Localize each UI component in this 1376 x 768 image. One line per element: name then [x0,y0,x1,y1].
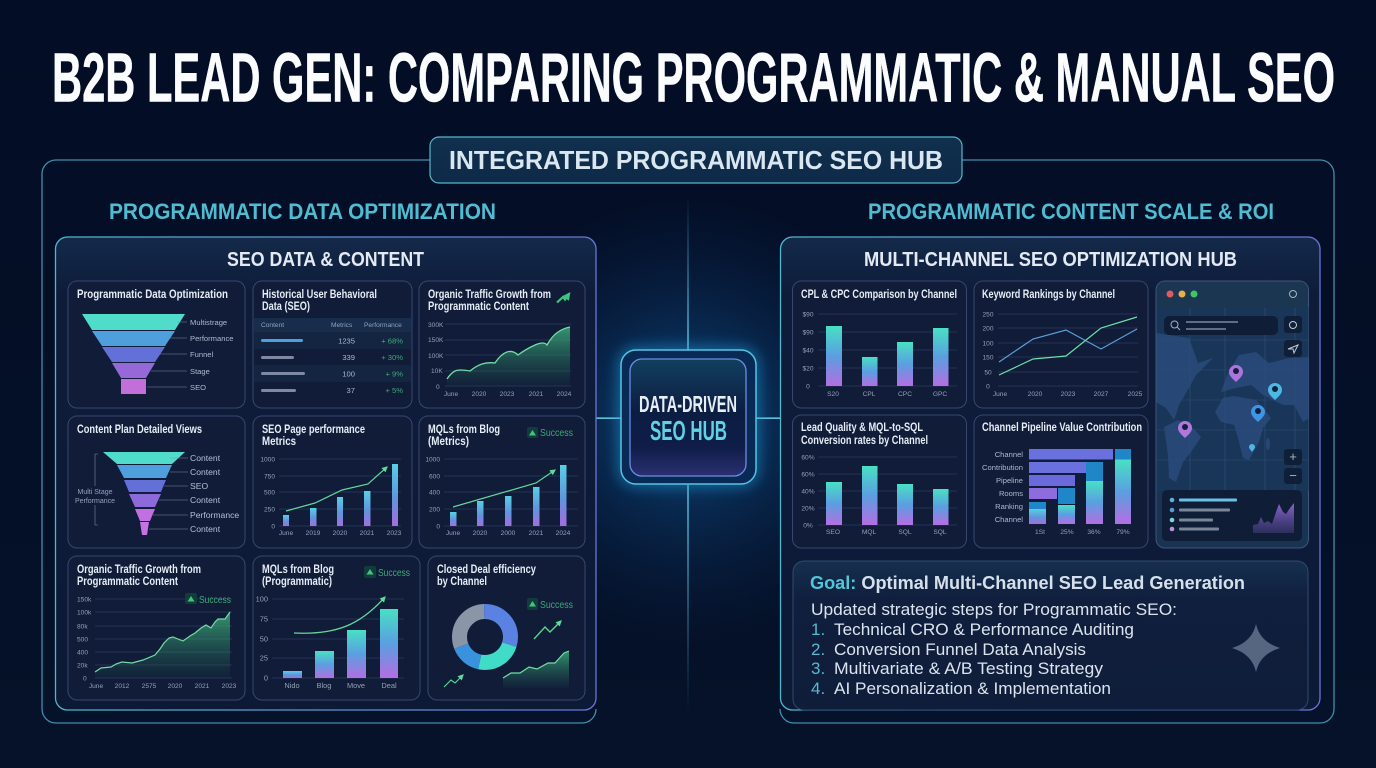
bar chart: Move [347,681,365,690]
card: CPL and CPC comparison: CPL & CPC Comparison by Channel [801,287,957,301]
funnel chart: Stage [190,367,210,376]
success badge [185,593,231,606]
panel: multi-channel SEO optimization hub [780,237,1320,710]
bar and line chart: 2021 [360,530,375,537]
bar and line chart: 500 [264,490,275,496]
area chart: 150K [428,337,444,344]
card: channel pipeline value: Channel Pipeline Value Contribution [982,420,1142,434]
bar chart: 100 [256,594,268,604]
bar chart: 0 [264,674,268,682]
strategic steps list: 1. [811,620,825,639]
stacked bar chart: Contribution [982,463,1023,472]
bar and line chart: June [279,530,293,537]
bar and line chart [425,456,578,537]
bar chart: 60% [801,454,815,462]
bar chart: Blog [317,681,331,690]
arrow: small trend up right [534,621,561,639]
bar chart: 0% [803,522,813,530]
central hub: SEO HUB [650,415,727,446]
search bar [1164,316,1278,335]
success badge: Success [540,428,573,439]
card: SEO page performance metrics [253,416,412,548]
area chart: 2023 [500,391,515,398]
bar and line chart: 400 [429,490,440,496]
funnel chart: Multistrage [190,318,227,327]
area chart: June [89,683,103,690]
bar and line chart: 0 [271,524,275,530]
bar chart: Nido [284,681,300,690]
bar chart [802,312,957,398]
card: historical user behavioral data [253,281,412,408]
area chart: 300K [428,322,444,329]
area chart [77,596,237,690]
card: lead quality MQL to SQL: Lead Quality & MQL-to-SQL [801,420,923,434]
data table: + 9% [385,370,403,378]
browser title bar [1156,282,1308,307]
card: SEO page performance metrics: SEO Page performance [262,422,365,436]
panel heading: SEO DATA & CONTENT [227,249,424,271]
strategic steps list: Conversion Funnel Data Analysis [834,640,1086,659]
data table: Metrics [331,322,353,329]
line chart: 100 [982,340,994,348]
card: closed deal efficiency [428,556,585,700]
data table: Content [261,322,284,329]
area chart: 0 [436,384,440,391]
card: MQLs from blog metrics: (Metrics) [428,434,469,448]
bar chart: GPC [933,391,947,398]
bar chart [256,594,404,690]
funnel chart: Content [190,453,221,463]
area chart: 2575 [142,683,157,690]
bar and line chart: 1000 [425,456,440,464]
line chart: 50 [984,370,992,376]
line chart: 2023 [1061,391,1076,398]
line chart: 2020 [1028,391,1043,398]
funnel chart: Multi Stage [77,489,113,496]
funnel chart: Performance [190,510,239,520]
success badge: Success [540,600,573,611]
bar and line chart: 2000 [501,530,516,537]
area chart: 2012 [115,683,130,690]
icon: sparkle star [1232,624,1280,672]
area chart: 2021 [195,683,210,690]
bar chart: S20 [827,391,839,398]
area chart: 100K [428,353,444,360]
data table: 37 [347,386,355,395]
card: MQLs from blog metrics: MQLs from Blog [428,422,500,436]
area chart: 150k [77,596,92,604]
line chart [982,312,1143,398]
bar and line chart [260,456,402,537]
card: organic traffic growth area chart: Programmatic Content [428,299,529,313]
bar and line chart: 2019 [306,530,321,537]
data table: + 30% [381,353,403,362]
card: historical user behavioral data: Data (SEO) [262,299,310,313]
bar and line chart: 2020 [473,530,488,537]
card: programmatic data optimization funnel: Programmatic Data Optimization [77,287,228,301]
connector lines [596,196,780,713]
bar chart: SQL [898,529,912,536]
central hub [618,347,759,487]
card: programmatic data optimization funnel [68,281,245,408]
bar chart: Deal [381,681,397,690]
bar and line chart: June [446,530,460,537]
funnel chart: Content [190,495,221,505]
funnel chart: Performance [190,334,233,343]
area chart: 2023 [222,683,237,690]
success badge: Success [378,568,410,579]
bar and line chart: 2020 [333,530,348,537]
bar chart: 75 [260,614,268,624]
bar chart: $20 [802,366,814,372]
bar chart: CPL [863,391,876,398]
card: organic traffic growth bottom [68,556,245,700]
bar and line chart: 2023 [387,530,402,537]
bar chart [801,454,957,536]
line chart: 200 [982,326,994,332]
bar and line chart: 0 [436,524,440,530]
card: lead quality MQL to SQL: Conversion rates by Channel [801,433,928,447]
data table: 100 [342,370,355,378]
card: content plan detailed views funnel: Content Plan Detailed Views [77,422,202,436]
area chart: June [444,391,458,398]
area chart: 2020 [168,683,183,690]
donut chart [460,612,510,662]
funnel chart: Content [190,524,221,534]
card: keyword rankings line chart [974,281,1148,408]
frame: right hub outline [780,160,1334,723]
banner: integrated hub: INTEGRATED PROGRAMMATIC SEO HUB [449,145,943,175]
bar chart: 40% [801,488,815,496]
arrow: small trend lower left [444,675,463,687]
card: MQLs from blog programmatic: MQLs from Blog [262,562,334,576]
funnel chart: Funnel [190,350,214,359]
bar chart: $90 [802,312,814,318]
funnel chart [82,314,233,394]
stacked bar chart: 25% [1060,529,1074,536]
card: channel pipeline value [974,415,1148,548]
card: closed deal efficiency: by Channel [437,574,487,588]
line chart: June [993,391,1007,398]
map buttons: − [1289,468,1297,483]
card: organic traffic growth bottom: Organic Traffic Growth from [77,562,201,576]
left section heading: PROGRAMMATIC DATA OPTIMIZATION [109,199,496,224]
card: closed deal efficiency: Closed Deal efficiency [437,562,536,576]
strategic steps list [811,600,1177,698]
stacked bar chart [982,449,1131,536]
icon: growth arrow [557,294,569,302]
data table: + 5% [385,386,403,395]
card: MQLs from blog programmatic [253,556,420,700]
area chart: 20k [77,662,88,670]
card: organic traffic growth area chart [419,281,585,408]
card: SEO page performance metrics: Metrics [262,434,296,448]
line chart: 2027 [1094,391,1109,398]
area chart: 100k [77,610,92,616]
stacked bar chart: Channel [995,515,1023,524]
bar chart: 50 [260,634,268,644]
stacked bar chart: Ranking [995,502,1023,511]
area chart: 10K [431,368,443,375]
stacked bar chart: Rooms [999,489,1023,498]
area sparkline [503,651,569,688]
funnel chart [75,452,239,535]
area chart: 400 [77,650,88,656]
banner: integrated hub [430,137,962,183]
data table: + 68% [381,336,403,346]
data table: Performance [364,322,402,329]
line chart: 250 [982,312,994,318]
card: keyword rankings line chart: Keyword Rankings by Channel [982,287,1115,301]
bar and line chart: 200 [429,506,440,514]
card: historical user behavioral data: Historical User Behavioral [262,287,377,301]
bar chart: SEO [826,529,840,536]
line chart: 2025 [1128,391,1143,398]
bar and line chart: 2024 [556,530,571,537]
bar chart: $90 [802,330,814,336]
frame: left hub outline [42,160,596,723]
success badge: Success [199,595,231,606]
stacked bar chart: Channel [995,450,1023,459]
funnel chart: Performance [75,498,115,505]
area chart: 2024 [557,391,572,398]
stacked bar chart: Pipeline [996,476,1023,485]
bar chart: SQL [933,529,947,536]
card: CPL and CPC comparison [792,281,966,408]
bar chart: 60% [801,472,815,478]
bar chart: 0 [806,384,810,390]
strategic steps list: Updated strategic steps for Programmatic SEO: [811,600,1177,619]
area chart: 0 [83,676,87,682]
strategic steps list: AI Personalization & Implementation [834,679,1111,698]
bar and line chart: 1000 [260,456,275,464]
panel: goal [793,561,1308,710]
success badge [364,566,410,579]
card: organic traffic growth bottom: Programmatic Content [77,574,178,588]
funnel chart: SEO [190,481,208,491]
area chart: 2020 [472,391,487,398]
area chart [428,322,572,398]
panel: SEO data and content [56,237,596,710]
strategic steps list: 4. [811,679,825,698]
card: content plan detailed views funnel [68,416,245,548]
success badge [527,598,573,611]
bar chart: 20% [801,506,815,512]
area chart: 80k [77,624,88,630]
strategic steps list: 2. [811,640,825,659]
stacked bar chart: 1St [1035,529,1045,536]
map pins [1178,365,1282,452]
goal heading: Goal: Optimal Multi-Channel SEO Lead Generation [810,573,1245,593]
success badge [527,427,573,439]
card: world map browser widget [1156,281,1310,548]
stacked bar chart: 36% [1087,529,1101,536]
funnel chart: SEO [190,383,206,392]
right section heading: PROGRAMMATIC CONTENT SCALE & ROI [868,199,1274,224]
bar and line chart: 2021 [529,530,544,537]
data table: 1235 [338,336,355,346]
bar chart: MQL [862,529,876,536]
strategic steps list: 3. [811,659,825,678]
bar and line chart: 600 [429,474,440,480]
bar and line chart: 750 [264,474,275,480]
line chart: 0 [986,384,990,390]
line chart: 150 [982,354,994,362]
strategic steps list: Multivariate & A/B Testing Strategy [834,659,1104,678]
bar and line chart: 250 [264,506,275,514]
data table [254,318,411,395]
card: MQLs from blog programmatic: (Programmatic) [262,574,332,588]
bar chart: 25 [260,654,268,662]
card: MQLs from blog metrics [419,416,585,548]
strategic steps list: Technical CRO & Performance Auditing [834,620,1134,639]
area chart: 500 [77,636,88,644]
bar chart: $40 [802,348,814,354]
data table: 339 [342,353,355,362]
central hub: DATA-DRIVEN [639,391,737,417]
area chart: 2021 [529,391,544,398]
map buttons: + [1289,449,1297,464]
card: organic traffic growth area chart: Organic Traffic Growth from [428,287,551,301]
card: lead quality MQL to SQL [792,415,966,548]
map buttons [1284,316,1302,484]
map legend panel [1162,490,1302,541]
funnel chart: Content [190,467,221,477]
panel heading: MULTI-CHANNEL SEO OPTIMIZATION HUB [864,249,1237,271]
map area with continents [1156,307,1310,491]
bar chart: CPC [898,391,912,398]
stacked bar chart: 79% [1116,529,1130,536]
